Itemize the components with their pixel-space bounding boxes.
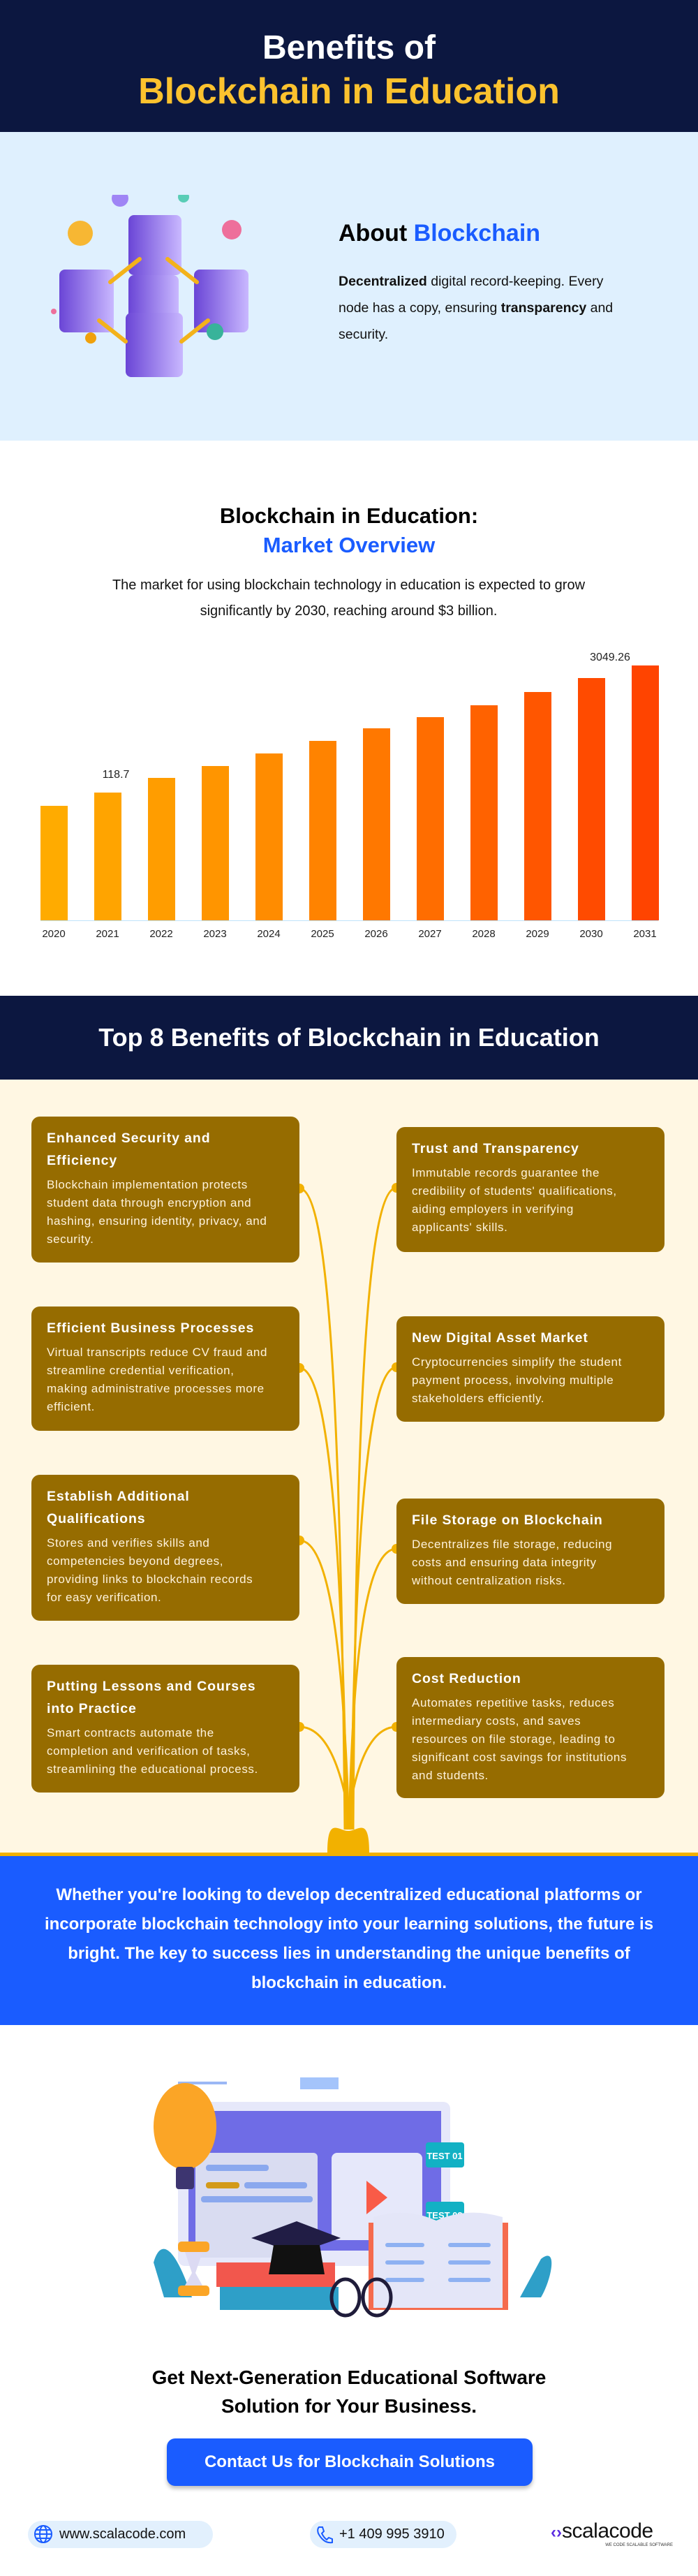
icon: globe — [34, 2525, 52, 2543]
footer: website pill: www.scalacode.com — [59, 2526, 186, 2542]
card: trust and transparency: Immutable records guarantee the credibility of students' qualifications, aiding employers in verifying applicants' skills. — [412, 1166, 617, 1234]
bar chart: market growth 2020-2031: 2028 — [472, 928, 496, 940]
icon: phone — [317, 2526, 333, 2543]
heading: market overview: Market Overview — [263, 533, 435, 557]
card: new digital asset market: New Digital Asset Market — [412, 1330, 588, 1346]
bar chart: market growth 2020-2031: 118.7 — [103, 769, 130, 781]
heading: top 8 benefits band — [0, 996, 698, 1080]
bar chart: market growth 2020-2031: 2027 — [418, 928, 442, 940]
heading: about blockchain: About Blockchain — [339, 220, 540, 246]
bar chart: market growth 2020-2031: 3049.26 — [590, 652, 630, 663]
card: cost reduction: Automates repetitive tasks, reduces intermediary costs, and saves resources on file storage, leading to significant cost savings for institutions and students. — [412, 1696, 627, 1782]
title — [138, 29, 560, 112]
heading: call to action — [152, 2367, 546, 2417]
card: file storage: Decentralizes file storage, reducing costs and ensuring data integrity without centralization risks. — [412, 1538, 612, 1587]
card: lessons into practice: Putting Lessons and Courses into Practice — [47, 1679, 256, 1716]
bar chart: market growth 2020-2031: 2021 — [96, 928, 119, 940]
icon: education illustration: TEST 01 — [426, 2151, 463, 2161]
button: contact us: Contact Us for Blockchain Solutions — [205, 2452, 495, 2471]
footer: logo: WE CODE SCALABLE SOFTWARE — [605, 2543, 673, 2547]
bar chart: market growth 2020-2031: 2022 — [149, 928, 173, 940]
card: new digital asset market: Cryptocurrencies simplify the student payment process, involving multiple stakeholders efficiently. — [412, 1355, 622, 1405]
bar chart: market growth 2020-2031: 2025 — [311, 928, 334, 940]
card: lessons into practice — [31, 1665, 299, 1793]
card: lessons into practice: Smart contracts automate the completion and verification of tasks, streamlining the educational process. — [47, 1726, 258, 1776]
connector lines — [299, 1183, 396, 1853]
footer: logo — [551, 2519, 673, 2547]
card: cost reduction: Cost Reduction — [412, 1671, 521, 1686]
title: Benefits of — [262, 29, 436, 66]
card: enhanced security: Enhanced Security and Efficiency — [47, 1131, 211, 1168]
card: efficient business processes — [31, 1307, 299, 1431]
footer: phone pill: +1 409 995 3910 — [339, 2526, 445, 2542]
button: contact us — [167, 2438, 533, 2486]
card: trust and transparency — [396, 1127, 664, 1252]
title: Blockchain in Education — [138, 71, 560, 112]
card: enhanced security: Blockchain implementation protects student data through encryption and hashing, ensuring identity, privacy, and security. — [47, 1178, 267, 1246]
heading: call to action: Solution for Your Business. — [221, 2395, 477, 2417]
bar chart: market growth 2020-2031: 2024 — [257, 928, 281, 940]
panel: about blockchain — [0, 132, 698, 441]
bar chart: market growth 2020-2031: 2023 — [203, 928, 227, 940]
footer: logo: ‹›scalacode — [551, 2519, 653, 2542]
text: about description: Decentralized digital record-keeping. Every node has a copy, ensuring transparency and security. — [339, 274, 613, 342]
bar chart: market growth 2020-2031: 2026 — [364, 928, 388, 940]
icon: education illustration — [154, 2077, 551, 2317]
bar chart: market growth 2020-2031: 2030 — [579, 928, 603, 940]
callout: conclusion band — [0, 1853, 698, 2025]
icon: education illustration: TEST 02 — [426, 2210, 463, 2221]
card: trust and transparency: Trust and Transparency — [412, 1141, 579, 1156]
text: conclusion: Whether you're looking to develop decentralized educational platforms or incorporate blockchain technology into your learning solutions, the future is bright. The key to success lies in understanding the unique benefits of blockchain in education. — [45, 1885, 653, 1992]
card: establish additional qualifications: Establish Additional Qualifications — [47, 1489, 190, 1526]
bar chart: market growth 2020-2031: 2020 — [42, 928, 66, 940]
heading: call to action: Get Next-Generation Educational Software — [152, 2367, 546, 2388]
card: new digital asset market — [396, 1316, 664, 1422]
footer: phone pill — [310, 2521, 456, 2548]
card: file storage: File Storage on Blockchain — [412, 1513, 603, 1528]
heading: market overview — [220, 503, 478, 557]
card: enhanced security — [31, 1117, 299, 1263]
card: file storage — [396, 1499, 664, 1604]
footer: website pill — [28, 2521, 213, 2548]
card: cost reduction — [396, 1657, 664, 1798]
bar chart: market growth 2020-2031: 2029 — [526, 928, 549, 940]
heading: market overview: Blockchain in Education: — [220, 503, 478, 528]
card: establish additional qualifications — [31, 1475, 299, 1621]
icon: blockchain cubes illustration — [51, 195, 248, 377]
heading: top 8 benefits band: Top 8 Benefits of Blockchain in Education — [98, 1023, 600, 1052]
card: efficient business processes: Virtual transcripts reduce CV fraud and streamline credential verification, making administrative processes more efficient. — [47, 1346, 267, 1413]
card: efficient business processes: Efficient Business Processes — [47, 1320, 254, 1336]
panel: benefits — [0, 1080, 698, 1853]
card: establish additional qualifications: Stores and verifies skills and competencies beyond degrees, providing links to blockchain records for easy verification. — [47, 1536, 253, 1604]
bar chart: market growth 2020-2031: 2031 — [633, 928, 657, 940]
header: title band — [0, 0, 698, 132]
text: market description: The market for using blockchain technology in education is expected to grow significantly by 2030, reaching around $3 billion. — [112, 577, 585, 619]
bar chart: market growth 2020-2031 — [40, 652, 659, 940]
